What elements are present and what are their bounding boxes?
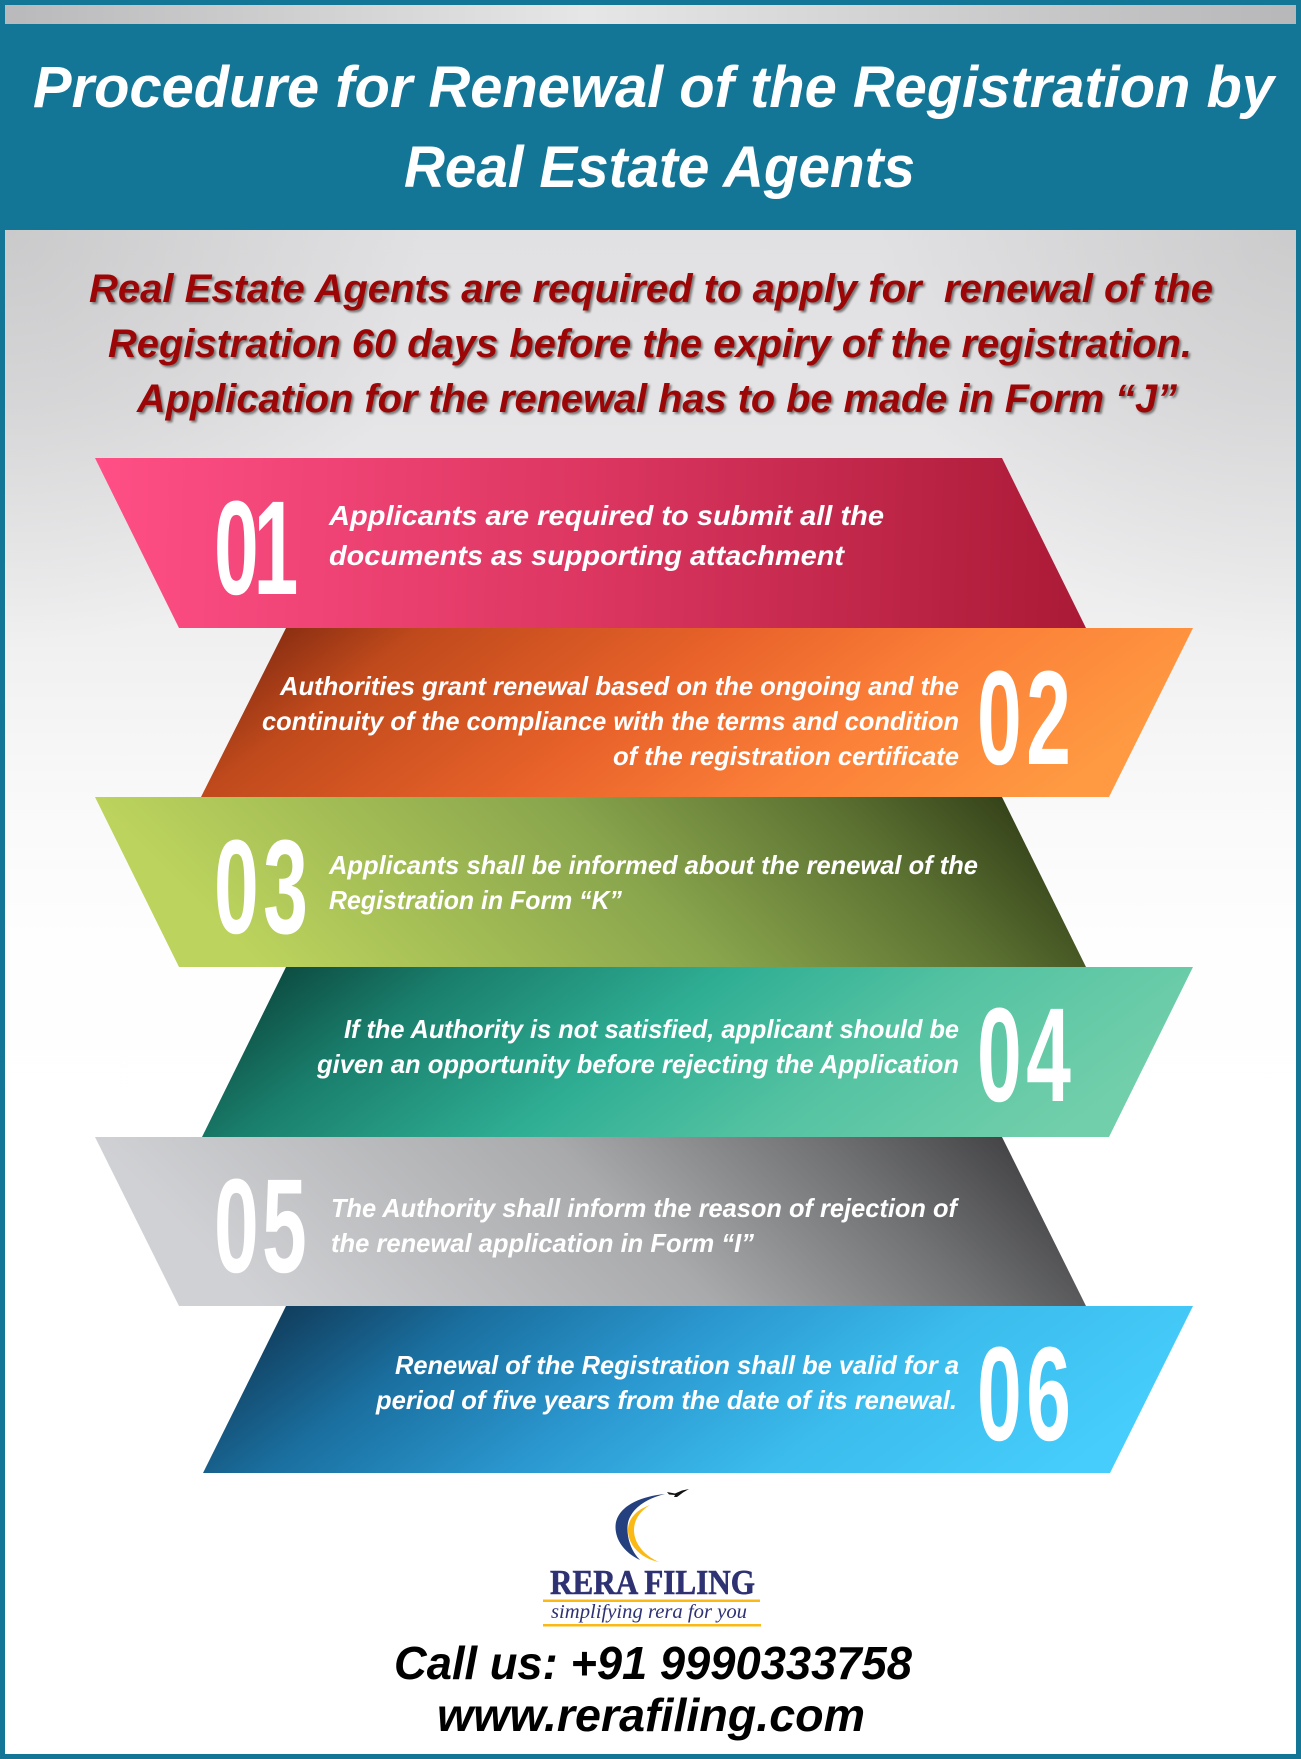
title: Real Estate Agents [404,135,915,200]
panel: step 04: 04 [977,981,1071,1130]
panel: step 02: 02 [977,644,1071,793]
panel: step 04: If the Authority is not satisfied, applicant should be [344,1014,959,1044]
panel: step 05: The Authority shall inform the reason of rejection of [331,1193,959,1223]
title [33,55,1277,200]
top grey strip [5,5,1296,24]
intro text [89,267,1213,421]
intro text: Real Estate Agents are required to apply for renewal of the [89,267,1213,311]
panel: step 04 [202,967,1193,1137]
panel: step 03 [95,797,1086,967]
intro text: Application for the renewal has to be made in Form “J” [136,377,1177,421]
panel: step 05 [95,1137,1086,1306]
panel: step 06: 06 [977,1320,1071,1469]
panel: step 01: documents as supporting attachment [329,540,846,571]
logo: RERA Filing [543,1489,761,1626]
intro text: Registration 60 days before the expiry of the registration. [108,322,1192,366]
panel: step 06: Renewal of the Registration shall be valid for a [395,1350,959,1380]
panel: step 02 [201,628,1193,797]
panel: step 01 [95,458,1086,628]
contact details: www.rerafiling.com [437,1689,865,1741]
contact details: Call us: +91 9990333758 [394,1637,912,1689]
panel: step 02: continuity of the compliance with the terms and condition [262,706,959,736]
panel: step 02: of the registration certificate [613,741,959,771]
contact details [394,1637,912,1741]
panel: step 03: Registration in Form “K” [329,885,622,915]
panel: step 06: period of five years from the date of its renewal. [375,1385,957,1415]
panel: step 05: 05 [214,1152,307,1301]
panel: step 06 [203,1306,1193,1473]
panel: step 05: the renewal application in Form “I” [331,1228,754,1258]
logo: RERA Filing: simplifying rera for you [551,1601,747,1623]
panel: step 01: 01 [214,474,298,623]
panel: step 02: Authorities grant renewal based on the ongoing and the [279,671,959,701]
logo: RERA Filing: RERA FILING [550,1563,755,1602]
panel: step 03: 03 [214,813,308,962]
panel: step 03: Applicants shall be informed about the renewal of the [328,850,978,880]
panel: step 04: given an opportunity before rejecting the Application [316,1049,959,1079]
title: Procedure for Renewal of the Registration by [33,55,1277,120]
panel: step 01: Applicants are required to submit all the [328,500,884,531]
